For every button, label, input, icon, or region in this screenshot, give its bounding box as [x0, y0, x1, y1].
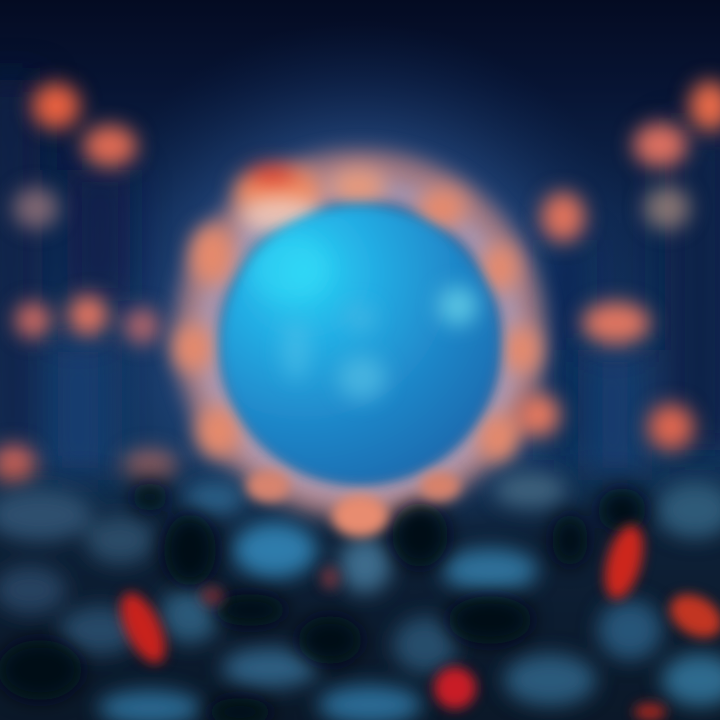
red accents — [112, 521, 720, 720]
blue blocks — [0, 472, 720, 720]
globe with glowing ring — [173, 164, 560, 500]
black gaps — [0, 483, 646, 720]
background glow — [70, 20, 650, 600]
outer ring glow — [195, 170, 525, 500]
inner pale ring — [210, 190, 510, 490]
left building lights — [0, 83, 178, 487]
foreground dark rubble base — [0, 455, 720, 720]
lower ring nodes over rubble — [246, 470, 460, 537]
ring nodes — [173, 164, 560, 462]
dark building towers — [0, 80, 720, 480]
globe highlights — [250, 234, 478, 400]
foreground blocks — [0, 470, 720, 720]
globe body — [220, 205, 500, 485]
right building lights — [541, 81, 720, 450]
pale highlight upper left — [240, 197, 320, 233]
